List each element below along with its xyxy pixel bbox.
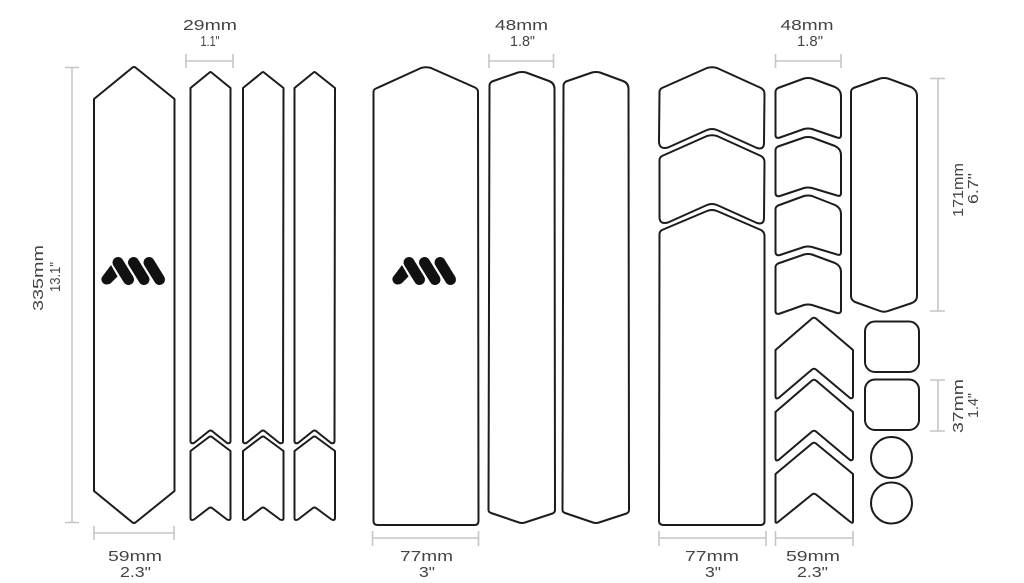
panel: narrow strip 2 lower	[243, 436, 284, 520]
dimension: 48mm width, third set: 1.8"	[797, 34, 823, 50]
group: third set of panels	[659, 67, 919, 525]
dimension: 59mm width, first set	[94, 526, 174, 581]
dimension: 29mm width: 29mm	[183, 18, 237, 34]
dimension: 48mm width, third set	[776, 18, 841, 68]
dimension: 29mm width: 1.1"	[200, 34, 220, 50]
panel: narrow strip 1 lower	[190, 436, 230, 520]
dimension: 59mm width, first set: 59mm	[108, 549, 162, 565]
dimension: 171mm height	[930, 78, 982, 311]
panel: tall 171mm strip	[851, 78, 917, 312]
dimension: 335mm overall height: 335mm	[31, 245, 47, 311]
panel: large hexagonal 59mm panel	[94, 67, 174, 523]
panel: narrow strip 3 upper	[294, 72, 335, 443]
dimension: 29mm width	[183, 18, 237, 68]
dimension: 37mm height	[930, 379, 982, 433]
dimension: 59mm width, third set: 2.3"	[797, 565, 828, 581]
panel: large chevron 1	[659, 67, 764, 148]
panel: small chevron 3	[776, 196, 841, 255]
dimension: 77mm width, second set: 3"	[419, 565, 435, 581]
dimension: 77mm width, third set: 77mm	[685, 549, 739, 565]
dimension: 335mm overall height	[31, 68, 79, 522]
panel: narrow strip 1 upper	[190, 72, 230, 443]
panel: circle 1	[871, 437, 912, 478]
panel: large 77mm panel	[374, 67, 478, 525]
panel: small chevron 2	[776, 137, 841, 196]
panel: narrow strip 3 lower	[294, 436, 335, 520]
dimension: 37mm height: 37mm	[951, 379, 967, 433]
dimension: 48mm width, second set: 1.8"	[510, 34, 535, 50]
dimension: 59mm width, third set: 59mm	[786, 549, 840, 565]
panel: 48mm strip 1	[488, 72, 555, 523]
panel: small chevron 4	[776, 254, 841, 314]
icon: brand logo on second panel	[392, 262, 450, 285]
dimension: 77mm width, second set: 77mm	[400, 549, 453, 565]
dimension: 48mm width, second set: 48mm	[495, 18, 548, 34]
panel: narrow strip 2 upper	[243, 72, 284, 443]
group: second set of panels	[374, 67, 629, 525]
group: first set of panels	[94, 67, 335, 523]
panel: small chevron 1	[776, 78, 841, 138]
panel: 48mm strip 2	[562, 72, 629, 523]
panel: pointed chevron 1	[776, 318, 853, 398]
panel: pointed chevron 2	[776, 380, 853, 460]
dimension: 48mm width, second set	[489, 18, 554, 68]
dimension: 59mm width, first set: 2.3"	[120, 565, 151, 581]
dimension: 48mm width, third set: 48mm	[780, 18, 834, 34]
panel: large chevron 2	[659, 135, 764, 223]
dimension: 77mm width, third set	[659, 531, 766, 581]
panel: rounded square 1	[865, 322, 919, 372]
panel: tall panel with peak	[659, 210, 764, 525]
panel: rounded square 2	[865, 380, 919, 430]
panel: circle 2	[871, 482, 912, 524]
dimension: 37mm height: 1.4"	[966, 393, 982, 418]
dimension: 77mm width, second set	[372, 531, 478, 581]
dimension: 77mm width, third set: 3"	[705, 565, 721, 581]
dimension: 171mm height: 171mm	[951, 163, 967, 217]
dimension: 59mm width, third set	[776, 531, 853, 581]
icon: brand logo on first panel	[101, 262, 160, 285]
dimension: 335mm overall height: 13.1"	[48, 262, 64, 292]
dimension: 171mm height: 6.7"	[966, 173, 982, 204]
panel: pointed chevron 3	[776, 443, 853, 523]
